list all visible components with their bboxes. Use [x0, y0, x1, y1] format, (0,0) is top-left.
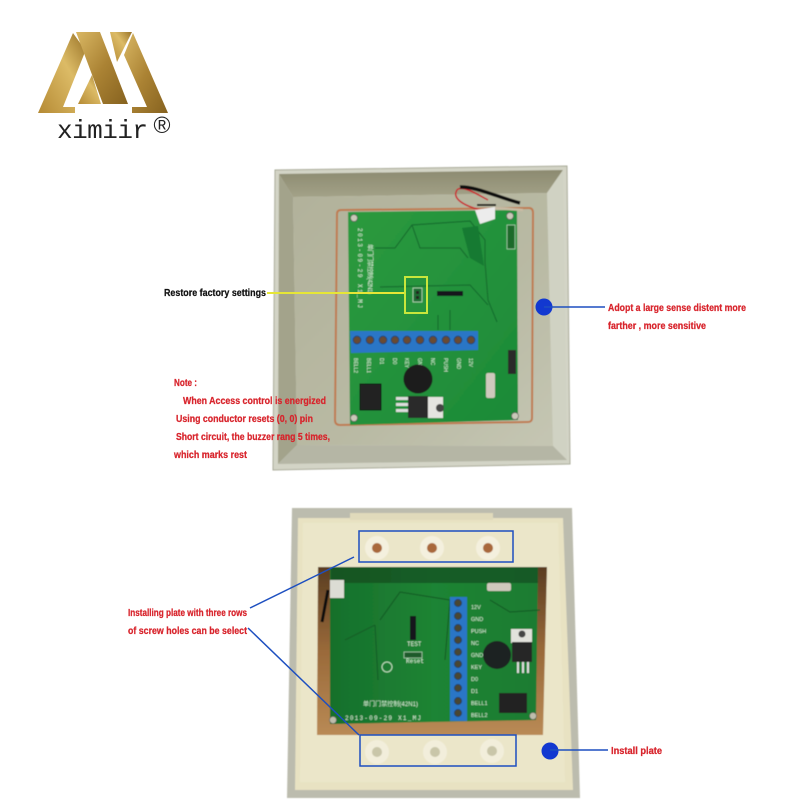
terminal labels	[471, 605, 488, 719]
terminal labels: D0	[391, 358, 397, 365]
terminal labels: KEY	[403, 358, 409, 369]
buzzer	[483, 641, 511, 669]
terminal labels: BELL2	[352, 358, 358, 373]
terminal labels: GND	[416, 358, 422, 370]
callout text: Installing plate with three rows	[128, 608, 247, 619]
voltage regulator	[396, 396, 444, 418]
voltage regulator	[511, 629, 532, 673]
test pin header	[410, 616, 416, 640]
yellow leader line	[267, 292, 405, 294]
callout text second line: farther , more sensitive	[608, 321, 706, 332]
callout text: Install plate	[611, 746, 662, 757]
terminal labels: D1	[378, 358, 384, 365]
note line 2: Using conductor resets (0, 0) pin	[176, 414, 313, 425]
yellow highlight box	[405, 277, 427, 313]
connector	[330, 580, 344, 598]
plate window	[317, 567, 547, 735]
terminal labels: NC	[471, 641, 479, 647]
callout: sense distance	[536, 298, 746, 332]
logo registered mark: ®	[154, 112, 171, 138]
callout text: Adopt a large sense distent more	[608, 303, 746, 314]
panel: top device, inside of enclosure	[273, 166, 570, 470]
corner screws	[350, 212, 518, 422]
logo mark	[38, 32, 168, 113]
callout text second line: of screw holes can be select	[128, 626, 248, 637]
test pin header	[437, 291, 463, 296]
board silkscreen model: 单门门禁控制(42N1)	[366, 244, 374, 294]
bottom highlight box	[360, 735, 516, 766]
top screw holes	[365, 536, 500, 560]
enclosure floor	[293, 193, 553, 446]
blue marker dot	[542, 742, 558, 760]
leader line down	[248, 628, 359, 735]
test label: TEST	[407, 641, 422, 648]
callout: install plate	[542, 742, 662, 760]
panel: bottom device, install plate	[287, 508, 580, 798]
terminal labels: NC	[429, 358, 435, 366]
terminal labels: 12V	[471, 605, 481, 611]
blue leader line	[550, 749, 608, 751]
note line 3: Short circuit, the buzzer rang 5 times,	[176, 432, 330, 443]
side pin header	[508, 350, 516, 374]
board silkscreen date: 2013-09-29 X1_MJ	[345, 715, 421, 722]
plate inner highlight	[300, 523, 565, 782]
note line 4: which marks rest	[173, 450, 248, 461]
bottom screw holes	[365, 739, 504, 764]
enclosure walls	[278, 170, 567, 464]
green circuit board	[348, 210, 518, 425]
callout: restore factory settings	[164, 277, 427, 313]
logo: ximiir	[38, 32, 171, 146]
screws	[330, 716, 336, 724]
leader line up	[250, 557, 354, 608]
small component	[507, 225, 515, 249]
blue screw terminal block	[450, 597, 467, 721]
crystal	[486, 373, 495, 398]
antenna coil	[335, 208, 533, 425]
reset pads	[404, 652, 422, 658]
enclosure outer shell	[273, 166, 570, 470]
blue screw terminal block	[350, 331, 478, 353]
terminal labels: BELL2	[471, 713, 488, 719]
terminal labels: KEY	[471, 665, 482, 671]
buzzer	[404, 364, 432, 394]
top highlight box	[359, 531, 513, 562]
callout: screw holes	[128, 531, 516, 766]
terminal labels: GND	[455, 358, 461, 370]
green circuit board	[322, 567, 540, 724]
plate raised top edge	[350, 513, 493, 520]
note line 1: When Access control is energized	[183, 396, 326, 407]
logo wordmark: ximiir	[57, 116, 148, 146]
plate outer shell	[287, 508, 580, 798]
terminal labels: GND	[471, 617, 483, 623]
relay	[360, 384, 381, 410]
terminal labels: 12V	[467, 358, 473, 368]
board silkscreen model: 单门门禁控制(42N1)	[363, 700, 418, 708]
relay	[499, 693, 527, 713]
board silkscreen date: 2013-09-29 X1_MJ	[356, 228, 363, 308]
terminal labels	[352, 358, 473, 373]
terminal labels: BELL1	[471, 701, 488, 707]
cream plate	[295, 518, 573, 790]
terminal labels: D1	[471, 689, 478, 695]
reset pads	[413, 288, 422, 302]
terminal labels: D0	[471, 677, 478, 683]
terminal labels: PUSH	[471, 629, 486, 635]
blue marker dot	[536, 298, 552, 316]
blue leader line	[544, 306, 605, 308]
reset label: Reset	[406, 658, 424, 665]
terminal labels: GND	[471, 653, 483, 659]
crystal	[487, 583, 511, 591]
logo stamp	[382, 662, 392, 672]
terminal labels: PUSH	[442, 358, 448, 372]
cable	[322, 590, 328, 622]
callout label: Restore factory settings	[164, 288, 266, 299]
note heading: Note :	[174, 378, 197, 389]
terminal labels: BELL1	[365, 358, 371, 373]
wire connector and cable	[456, 187, 523, 224]
text block: reset note	[173, 378, 330, 461]
